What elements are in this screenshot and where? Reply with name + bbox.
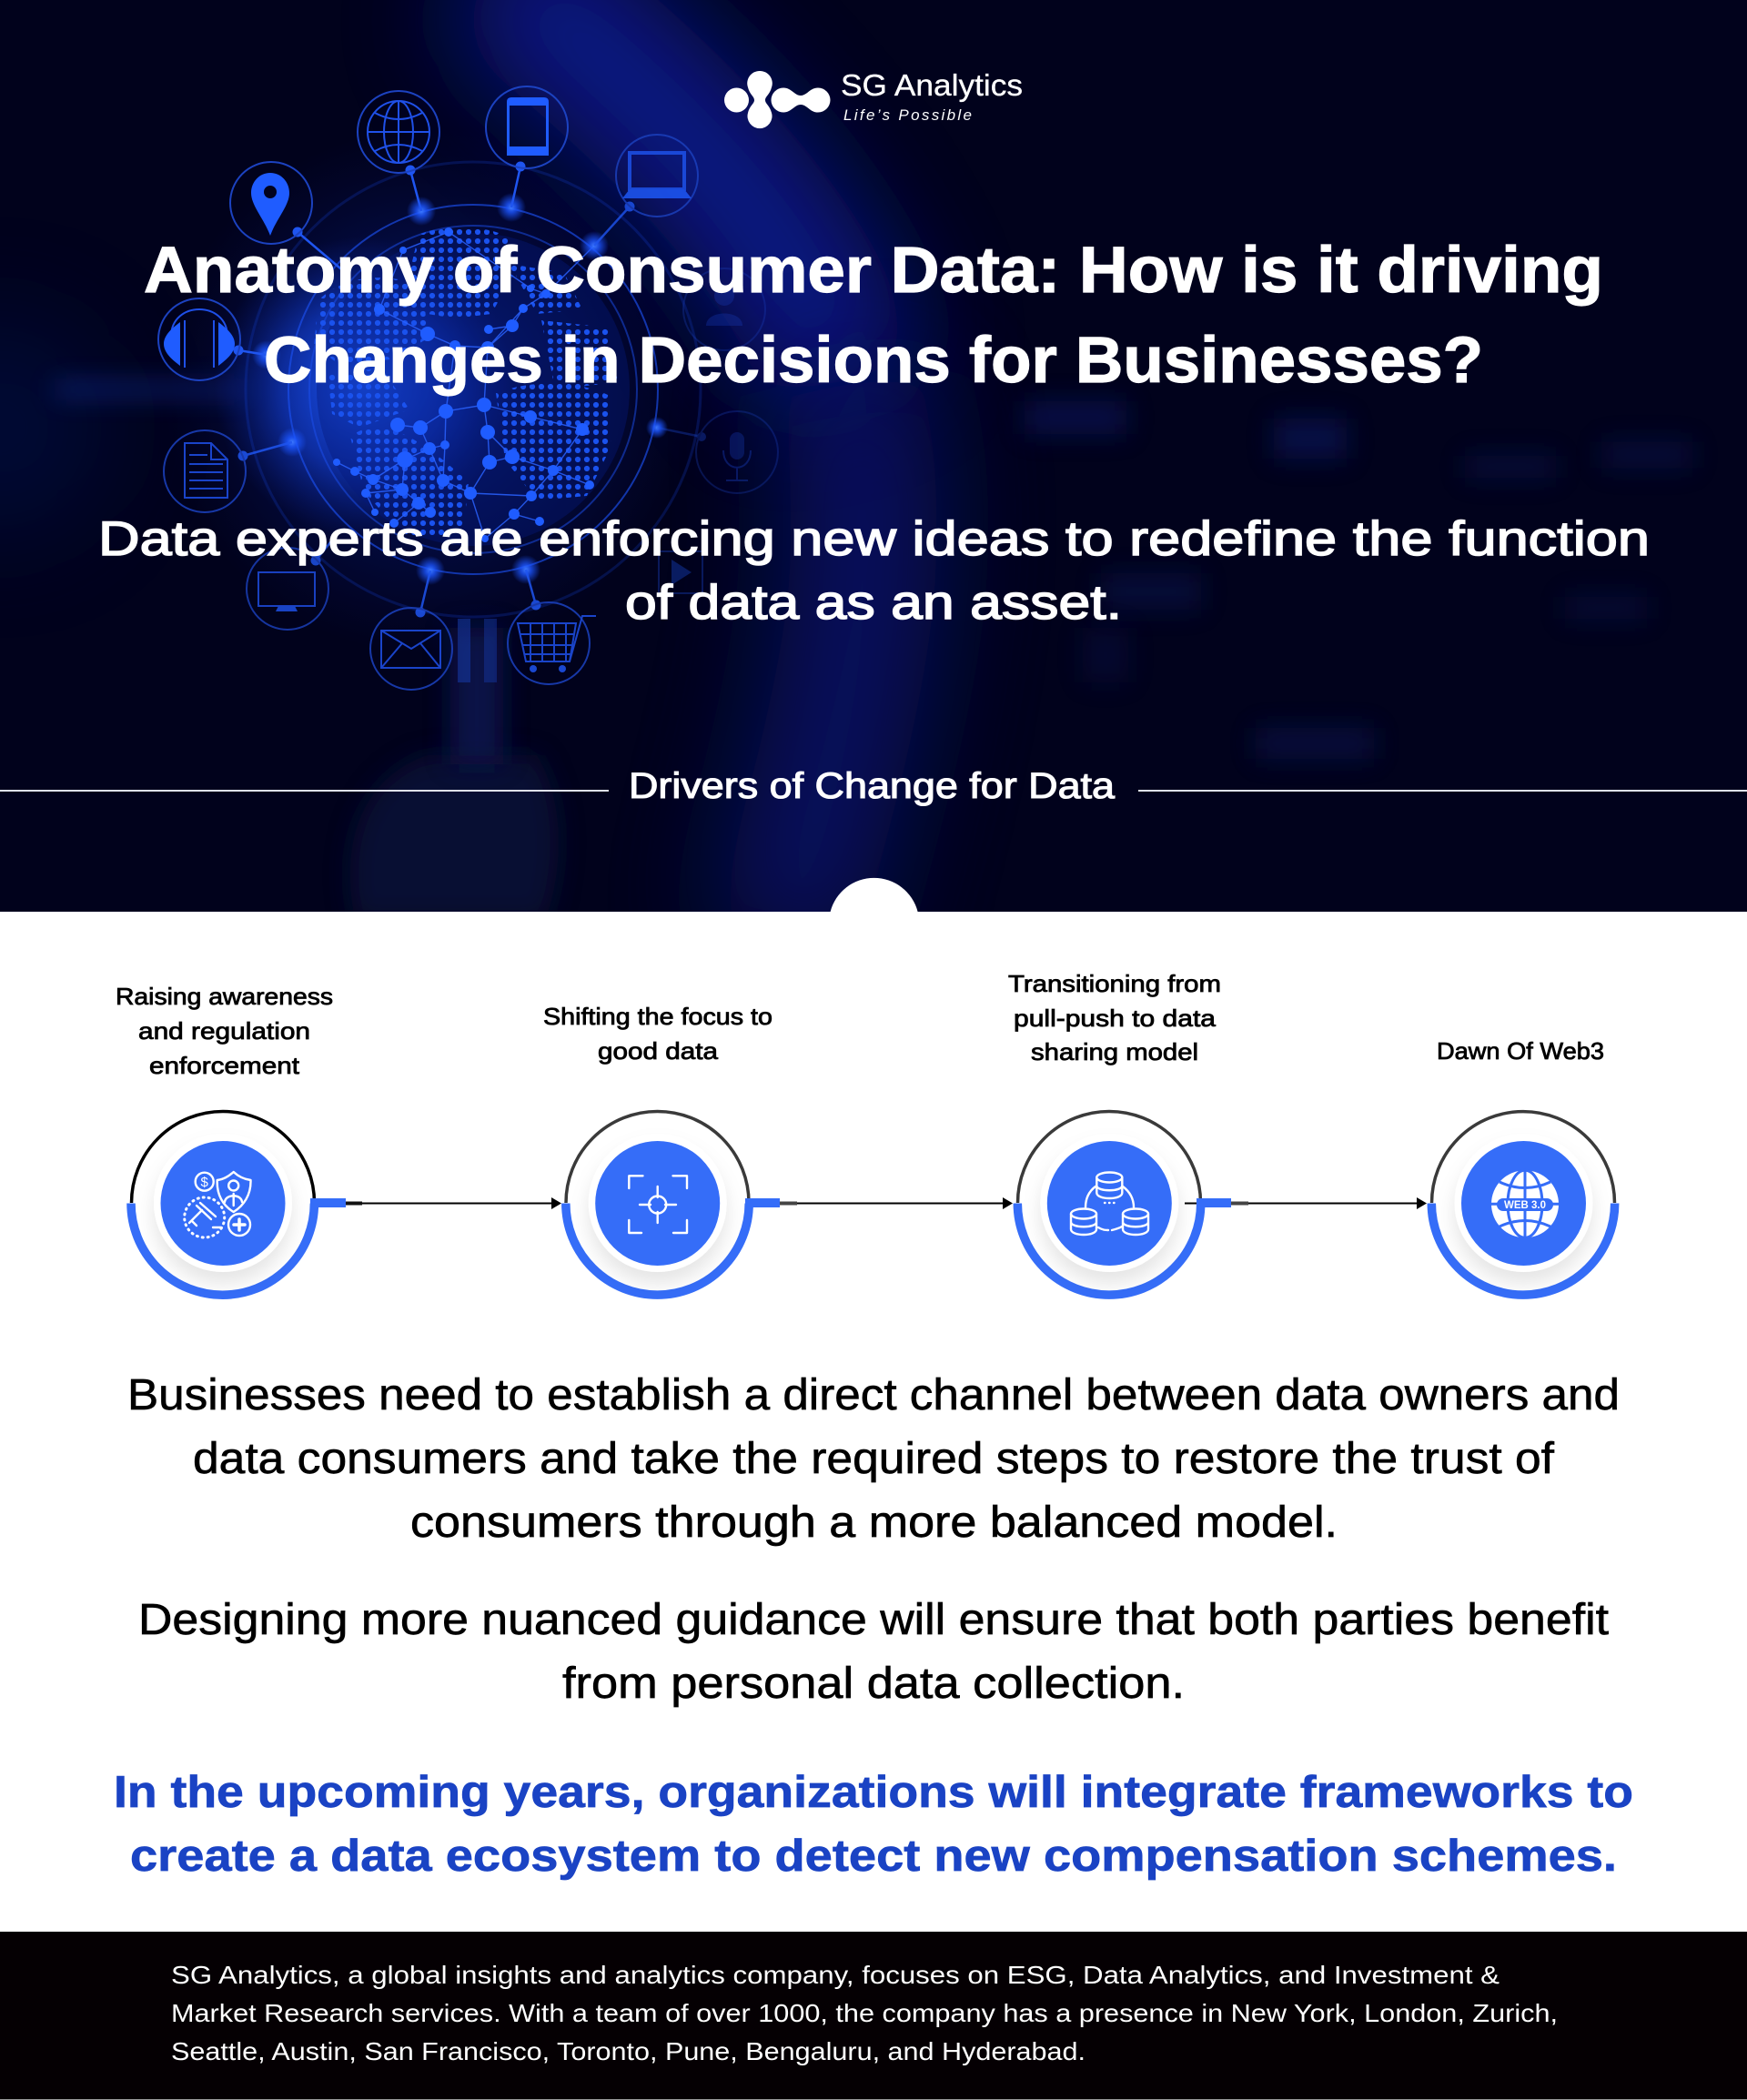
label: Transitioning from pull-push to data sharing model: sharing model — [1031, 1038, 1198, 1065]
label: Shifting the focus to good data — [543, 1003, 773, 1065]
icon: hand holding magnifier — [350, 619, 559, 919]
icon: location pin — [230, 162, 346, 273]
icon: headphones — [158, 298, 267, 380]
text block: direct channel paragraph: data consumers and take the required steps to restore the trust of — [193, 1435, 1555, 1483]
label: Transitioning from pull-push to data sharing model: Transitioning from — [1008, 970, 1221, 997]
text: company description: Seattle, Austin, San Francisco, Toronto, Pune, Bengaluru, and Hyderabad. — [171, 2037, 1086, 2065]
icon: web 3.0 globe — [1491, 1170, 1559, 1237]
label: Raising awareness and regulation enforcement: enforcement — [149, 1052, 300, 1079]
icon: logo mark — [724, 71, 830, 128]
icon: web 3.0 globe: WEB 3.0 — [1504, 1200, 1546, 1211]
panel: dark header background — [0, 0, 1747, 946]
label: Shifting the focus to good data: good data — [598, 1037, 719, 1065]
text block: direct channel paragraph: Businesses need to establish a direct channel between data owners and — [127, 1371, 1620, 1419]
icon: shopping cart — [508, 570, 596, 684]
icon: tablet — [486, 86, 568, 207]
text: company description — [171, 1961, 1558, 2065]
subtitle — [98, 512, 1650, 630]
step 3: circle — [1017, 1111, 1231, 1295]
icon: regulation — [185, 1172, 251, 1237]
icon: envelope — [370, 570, 452, 690]
text block: direct channel paragraph: consumers through a more balanced model. — [410, 1499, 1338, 1547]
title: Anatomy of Consumer Data: How is it driving — [144, 235, 1603, 307]
panel: black footer — [0, 1932, 1747, 2100]
text: company description: SG Analytics, a global insights and analytics company, focuses on ESG, Data Analytics, and Investment & — [171, 1961, 1500, 1989]
panel: white content area — [0, 878, 1747, 1932]
icon: focus target — [629, 1176, 687, 1233]
logo: SG Analytics — [724, 68, 1023, 128]
icon: regulation: $ — [201, 1175, 209, 1190]
subtitle: of data as an asset. — [625, 576, 1122, 630]
text block: direct channel paragraph — [127, 1371, 1620, 1547]
label: Raising awareness and regulation enforcement: and regulation — [138, 1017, 310, 1045]
icon: world globe — [358, 91, 439, 211]
label: Dawn Of Web3: Dawn Of Web3 — [1437, 1037, 1604, 1065]
arrow: step 2 to 3 — [780, 1197, 1013, 1209]
text: company description: Market Research services. With a team of over 1000, the company has a presence in New York, London, Zurich, — [171, 1999, 1558, 2027]
icon: shared databases — [1071, 1172, 1148, 1235]
text block: blue conclusion — [114, 1768, 1633, 1881]
label: Raising awareness and regulation enforcement: Raising awareness — [116, 983, 333, 1010]
step 1: circle — [131, 1111, 346, 1295]
icon: dim people, microphone and play — [657, 268, 778, 593]
text block: nuanced guidance paragraph — [138, 1596, 1609, 1708]
section heading: Drivers of Change for Data: Drivers of Change for Data — [629, 766, 1116, 806]
text block: blue conclusion: In the upcoming years, organizations will integrate frameworks to — [114, 1768, 1633, 1817]
icon: monitor — [246, 541, 330, 631]
arrow: step 3 to 4 — [1185, 1197, 1427, 1209]
label: Transitioning from pull-push to data sharing model: pull-push to data — [1014, 1005, 1217, 1032]
icon: laptop — [594, 135, 698, 246]
text block: nuanced guidance paragraph: Designing more nuanced guidance will ensure that both parties benefit — [138, 1596, 1609, 1644]
illustration: data globe — [198, 160, 702, 622]
text: company name: SG Analytics — [841, 68, 1023, 102]
title: Changes in Decisions for Businesses? — [264, 325, 1483, 397]
step 4: circle — [1431, 1112, 1615, 1295]
step 2: circle — [566, 1111, 780, 1295]
label: Transitioning from pull-push to data sharing model — [1008, 970, 1221, 1065]
title — [144, 235, 1603, 397]
label: Shifting the focus to good data: Shifting the focus to — [543, 1003, 773, 1030]
subtitle: Data experts are enforcing new ideas to redefine the function — [98, 512, 1650, 566]
text block: nuanced guidance paragraph: from personal data collection. — [562, 1660, 1185, 1708]
text: tagline: Life’s Possible — [843, 106, 972, 124]
arrow: step 1 to 2 — [346, 1197, 561, 1209]
text block: blue conclusion: create a data ecosystem to detect new compensation schemes. — [130, 1832, 1617, 1881]
label: Raising awareness and regulation enforcement — [116, 983, 333, 1079]
icon: document — [164, 430, 292, 512]
